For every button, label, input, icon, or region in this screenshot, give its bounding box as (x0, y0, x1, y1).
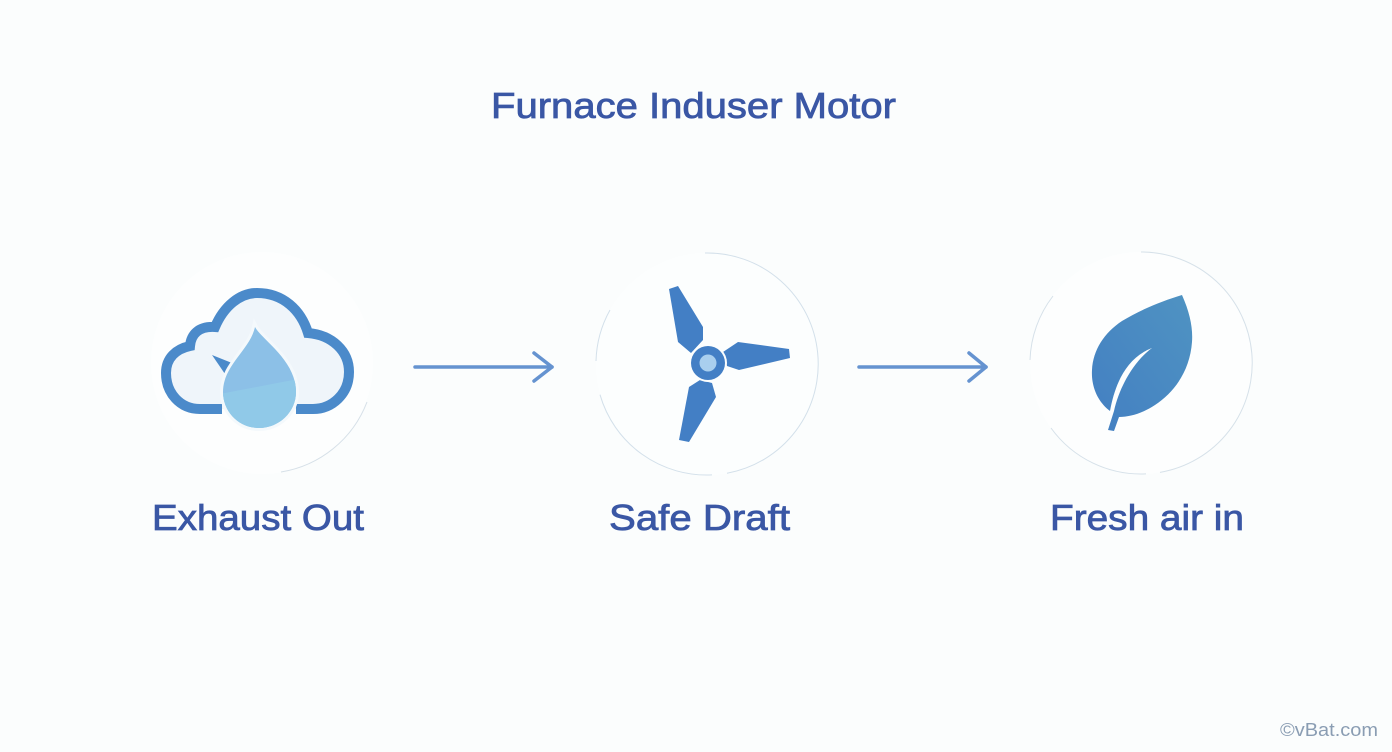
icon circle: fan (596, 253, 818, 475)
icon: leaf (1092, 295, 1192, 431)
step 2: safe draft (596, 253, 818, 538)
label: fresh air in: Fresh air in (1050, 497, 1244, 538)
watermark: ©vBat.com (1280, 720, 1378, 740)
icon: fan (669, 286, 790, 442)
arrow: draft to fresh air (859, 353, 986, 381)
label: exhaust out: Exhaust Out (152, 497, 364, 538)
icon circle: exhaust (151, 252, 373, 474)
step 3: fresh air in (1030, 252, 1252, 538)
step 1: exhaust out (154, 288, 368, 531)
icon: water drop (220, 327, 298, 432)
icon circle: leaf (1030, 252, 1252, 474)
arrow: exhaust to draft (415, 353, 552, 381)
icon: cloud (166, 293, 349, 409)
label: safe draft: Safe Draft (609, 497, 790, 538)
title: Furnace Induser Motor (491, 85, 896, 126)
